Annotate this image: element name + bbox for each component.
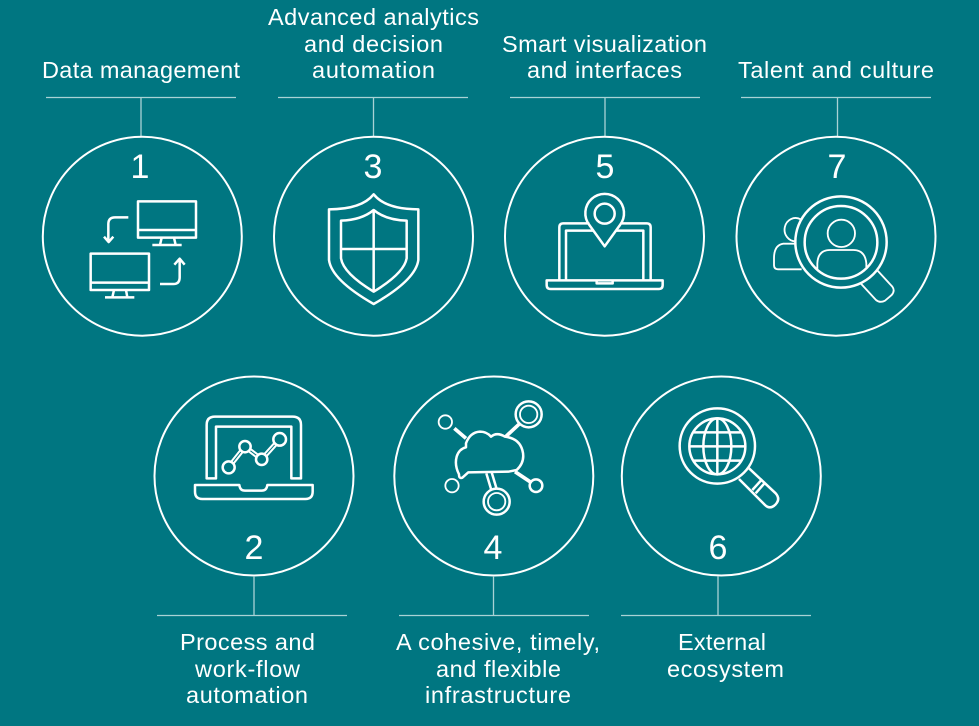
circle xyxy=(274,137,473,336)
number 1: 1 xyxy=(131,148,149,186)
heading: cohesive infrastructure xyxy=(396,629,600,708)
heading: external ecosystem: External xyxy=(678,629,766,655)
number 2: 2 xyxy=(245,529,263,567)
heading: smart visualization: Smart visualization xyxy=(502,31,707,57)
circle xyxy=(505,137,704,336)
heading: data management: Data management xyxy=(42,57,240,83)
number 3: 3 xyxy=(364,148,382,186)
heading: process and work-flow automation: automation xyxy=(186,682,308,708)
icon: laptop with line chart xyxy=(195,417,313,499)
heading: cohesive infrastructure: infrastructure xyxy=(425,682,571,708)
heading: advanced analytics: Advanced analytics xyxy=(268,4,479,30)
circle xyxy=(394,376,593,576)
panel: 7 talent and culture xyxy=(736,57,936,336)
connector xyxy=(278,98,468,137)
heading: smart visualization: and interfaces xyxy=(527,57,682,83)
heading: process and work-flow automation: Process and xyxy=(180,629,315,655)
heading: smart visualization xyxy=(502,31,707,83)
connector xyxy=(510,98,700,137)
heading: process and work-flow automation: work-flow xyxy=(194,656,301,682)
icon: shield xyxy=(329,194,418,304)
panel: 4 infrastructure xyxy=(394,376,600,708)
panel: 5 smart visualization xyxy=(502,31,707,336)
connector xyxy=(399,576,589,616)
panel: 3 advanced analytics xyxy=(268,4,479,336)
heading: advanced analytics: automation xyxy=(312,57,435,83)
circle xyxy=(154,376,354,576)
connector xyxy=(741,98,931,137)
heading: cohesive infrastructure: A cohesive, timely, xyxy=(396,629,600,655)
connector xyxy=(157,576,347,616)
heading: talent and culture: Talent and culture xyxy=(738,57,934,83)
panel: 1 data management xyxy=(42,57,242,336)
icon: two monitors with arrows xyxy=(91,201,196,297)
panel: 2 process automation xyxy=(154,376,354,708)
heading: external ecosystem: ecosystem xyxy=(667,656,784,682)
number 7: 7 xyxy=(828,148,846,186)
heading: advanced analytics xyxy=(268,4,479,83)
heading: cohesive infrastructure: and flexible xyxy=(436,656,561,682)
icon: connected cloud xyxy=(439,401,542,515)
icon: laptop with map pin xyxy=(547,194,663,289)
circle xyxy=(736,137,936,336)
icon: globe magnifier xyxy=(680,408,778,507)
circle xyxy=(622,376,821,576)
number 5: 5 xyxy=(596,148,614,186)
panel: 6 external ecosystem xyxy=(621,376,821,682)
connector xyxy=(621,576,811,616)
heading: process and work-flow automation xyxy=(180,629,315,708)
connector xyxy=(46,98,236,137)
heading: advanced analytics: and decision xyxy=(304,31,443,57)
number 4: 4 xyxy=(484,529,502,567)
circle xyxy=(43,137,242,336)
icon: magnifier over people xyxy=(774,196,894,302)
number 6: 6 xyxy=(709,529,727,567)
heading: external ecosystem xyxy=(667,629,784,682)
